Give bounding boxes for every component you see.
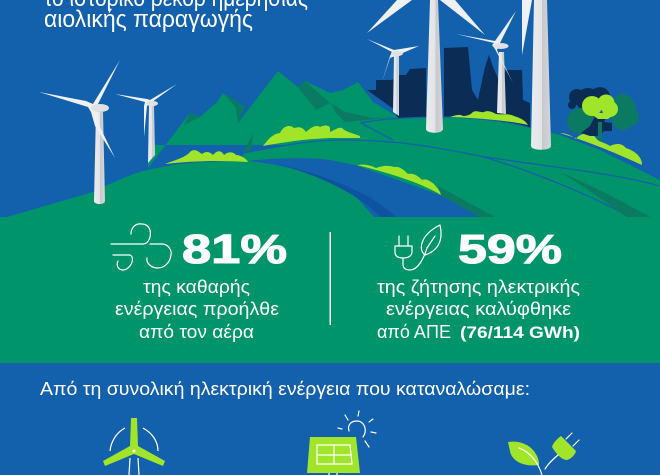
bottom blue section — [0, 363, 660, 475]
city skyline — [367, 47, 530, 130]
number: 81%: 81% — [182, 226, 287, 272]
icon: leaf and plug — [508, 433, 579, 475]
icon: wind turbine — [103, 418, 165, 475]
divider — [330, 232, 331, 325]
blue valley — [248, 158, 482, 218]
tree — [567, 87, 639, 140]
turbine large centre — [367, 0, 485, 133]
ground band — [0, 217, 660, 363]
number: 59%: 59% — [458, 226, 562, 272]
caption: demand covered: της ζήτησης ηλεκτρικής — [377, 276, 580, 297]
caption: clean energy: από τον αέρα — [139, 321, 254, 342]
title — [44, 0, 308, 33]
stat: 59 percent — [377, 225, 580, 342]
hill upper right — [243, 117, 660, 218]
mountains — [148, 71, 398, 168]
caption: demand covered: από ΑΠΕ — [377, 321, 451, 342]
stat: 81 percent — [111, 224, 287, 342]
turbine left small — [115, 84, 177, 163]
subheading: Από τη συνολική ηλεκτρική ενέργεια που καταναλώσαμε: — [40, 379, 530, 399]
caption: clean energy: ενέργειας προήλθε — [115, 298, 279, 319]
caption: clean energy: της καθαρής — [143, 276, 250, 297]
turbine small right — [456, 11, 516, 114]
hill lines — [243, 117, 660, 217]
hill front left — [0, 161, 375, 219]
caption: demand covered: ενέργειας καλύφθηκε — [386, 298, 571, 319]
icon: wind — [111, 224, 171, 270]
turbine left big — [39, 60, 120, 204]
caption: demand covered — [377, 276, 580, 342]
bushes — [165, 111, 642, 195]
caption: demand covered: (76/114 GWh) — [460, 324, 580, 342]
turbine large right — [522, 0, 551, 150]
caption: clean energy — [115, 276, 279, 342]
icon: solar panel — [307, 411, 376, 475]
valley shadows — [270, 163, 652, 218]
turbine small far left — [367, 39, 419, 116]
title: αιολικής παραγωγής — [44, 6, 253, 33]
icon: plug and leaf — [395, 225, 441, 270]
